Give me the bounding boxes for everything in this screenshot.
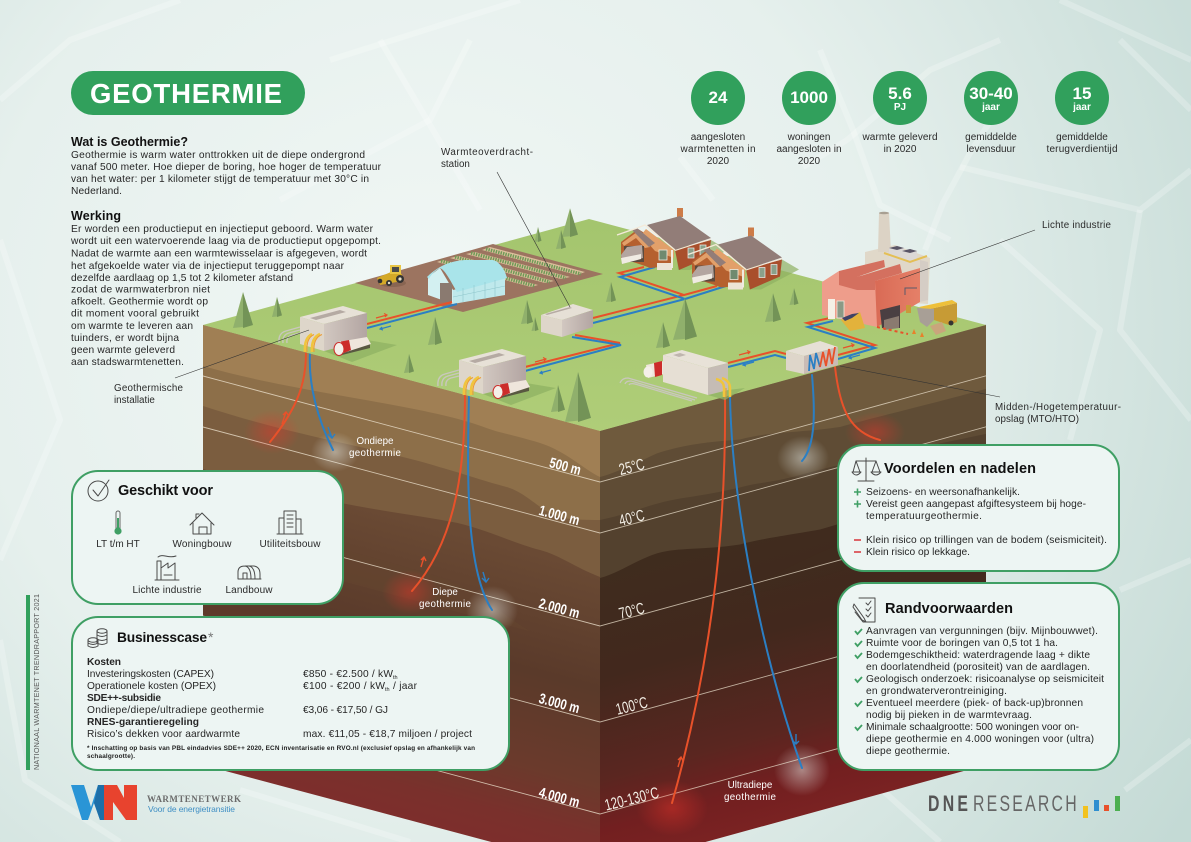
geological block: left face (203, 325, 600, 842)
icon: balance scale (852, 458, 881, 481)
list: Klein risico op trillingen van de bodem (seismiciteit). (866, 535, 1107, 546)
icon: check circle (88, 480, 109, 501)
logo: warmtenetwerk: Voor de energietransitie (148, 804, 235, 814)
underground wells (270, 352, 880, 803)
footnote: * Inschatting op basis van PBL eindadvies SDE++ 2020, ECN inventarisatie en RVO.nl (exclusief opslag en afhankelijk van (87, 745, 475, 752)
well: ultradiepe geothermie (672, 397, 802, 803)
stat: 15 jaar (1046, 71, 1118, 155)
depth labels (537, 454, 583, 811)
well: ondiepe geothermie (270, 352, 333, 450)
list: Aanvragen van vergunningen (bijv. Mijnbouwwet). (866, 626, 1098, 637)
list: Seizoens- en weersonafhankelijk. (866, 487, 1020, 498)
depth labels: 1.000 m (537, 502, 582, 529)
flow arrows underground (282, 412, 799, 767)
list: Eventueel meerdere (piek- of back-up)bronnen (866, 698, 1083, 709)
logo: DNE research: RESEARCH (973, 793, 1077, 817)
logo: warmtenetwerk: WARMTENETWERK (147, 794, 241, 804)
panel: geschikt voor (72, 471, 343, 604)
text block: wat is geothermie: Nederland. (71, 186, 122, 197)
footnote: schaalgrootte). (87, 753, 135, 760)
cost table: Ondiepe/diepe/ultradiepe geothermie (87, 705, 264, 716)
stat: 1000 woningen: 1000 (790, 88, 828, 107)
callout: warmteoverdrachtstation (441, 147, 570, 307)
side bar with report title: NATIONAAL WARMTENET TRENDRAPPORT 2021 (32, 594, 41, 770)
heading: Businesscase (117, 630, 207, 645)
geological block: right face (600, 325, 986, 842)
heat and cold reservoir glows (244, 410, 905, 836)
list: Klein risico op lekkage. (866, 547, 970, 558)
text block: werking: Nadat de warmte aan een warmtewisselaar is afgegeven, wordt (71, 248, 367, 260)
temperature labels: 25°C (617, 454, 646, 478)
text block: werking: het afgekoelde water via de injectieput teruggepompt naar (71, 261, 345, 272)
cost table: €3,06 - €17,50 / GJ (303, 705, 388, 716)
temperature labels (603, 454, 661, 814)
stat: 5.6 PJ: 5.6 (888, 84, 912, 103)
cost table: th (393, 675, 398, 681)
panel: businesscase (72, 617, 509, 770)
tractor (377, 265, 406, 287)
text block: wat is geothermie: Wat is Geothermie? (71, 135, 188, 149)
icon: greenhouse (238, 566, 261, 579)
depth labels: 4.000 m (537, 784, 582, 811)
cost table (87, 657, 472, 740)
well label: diepe: geothermie (419, 599, 472, 610)
geothermal plant 3 (620, 350, 745, 401)
heading: Voordelen en nadelen (884, 461, 1036, 477)
list: en doorlatendheid (porositeit) van de aardlagen. (866, 662, 1090, 673)
list (866, 626, 1104, 757)
label: landbouw: Landbouw (226, 585, 273, 596)
logo: DNE research: DNE (928, 793, 968, 817)
list: temperatuurgeothermie. (866, 511, 982, 522)
title pill (71, 71, 305, 115)
cost table: th (385, 687, 390, 693)
minus markers (854, 540, 861, 552)
surface flow arrows (376, 314, 860, 374)
callout: geothermische installatie (114, 330, 309, 406)
label: lichte industrie: Lichte industrie (132, 585, 202, 596)
list: nodig bij pieken in de warmtevraag. (866, 710, 1032, 721)
stat: 24 warmtenetten: 2020 (707, 156, 730, 167)
list: Vereist geen aangepast afgiftesysteem bij hoge- (866, 499, 1086, 510)
stat: 15 jaar: gemiddelde (1056, 132, 1108, 143)
text block: werking: dit moment vooral gebruikt (71, 308, 199, 320)
callout: warmteoverdrachtstation: station (441, 159, 470, 170)
callout: warmteoverdrachtstation: Warmteoverdracht- (441, 147, 533, 158)
callout: MTO/HTO opslag: Midden-/Hogetemperatuur- (995, 402, 1121, 413)
pipes to greenhouse and houses (367, 267, 875, 371)
cost table: Operationele kosten (OPEX) (87, 681, 216, 692)
well label: ondiepe: geothermie (349, 448, 402, 459)
text block: werking: zodat de warmwaterbron niet (71, 284, 210, 296)
callout: lichte industrie (900, 220, 1112, 279)
houses (617, 208, 799, 290)
heat-transfer station (541, 304, 593, 337)
list: Minimale schaalgrootte: 500 woningen voor on- (866, 722, 1079, 733)
stat: 15 jaar: terugverdientijd (1046, 144, 1118, 155)
callout: MTO/HTO opslag (840, 366, 1121, 425)
well: MTO/HTO storage (802, 367, 880, 461)
logo: warmtenetwerk (71, 785, 241, 820)
cost table: / jaar (393, 681, 418, 692)
well: diepe geothermie (412, 395, 492, 610)
stat: 5.6 PJ: PJ (894, 102, 906, 113)
label: woningbouw: Woningbouw (172, 539, 232, 550)
cost table: €100 - €200 / kW (303, 681, 385, 692)
stat: 5.6 PJ (862, 71, 938, 155)
panel: voordelen en nadelen (838, 445, 1119, 571)
greenhouse (427, 260, 507, 304)
stat: 24 warmtenetten (680, 71, 756, 167)
cost table: Investeringskosten (CAPEX) (87, 669, 214, 680)
text block: werking: dezelfde aardlaag op 1,5 tot 2 kilometer afstand (71, 273, 293, 284)
temperature labels: 120-130°C (603, 783, 661, 814)
icon: factory (155, 556, 179, 580)
well label: ondiepe: Ondiepe (356, 436, 394, 447)
plus markers (854, 488, 861, 508)
icon: office building (277, 511, 303, 534)
check markers (855, 629, 862, 730)
text block: werking: afkoelt. Geothermie wordt op (71, 296, 208, 308)
text block: wat is geothermie: Geothermie is warm water onttrokken uit de diepe ondergrond (71, 150, 365, 161)
list (866, 487, 1107, 558)
icon: thermometer (114, 511, 122, 535)
well label: ultradiepe: Ultradiepe (728, 780, 773, 791)
depth labels: 2.000 m (537, 595, 582, 622)
stat: 24 warmtenetten: aangesloten (691, 132, 745, 143)
well label: ultradiepe (724, 780, 777, 803)
well label: ondiepe (349, 436, 402, 459)
panel: randvoorwaarden (838, 583, 1119, 770)
MTO/HTO storage unit (786, 341, 838, 374)
cost table: Risico’s dekken voor aardwarmte (87, 729, 240, 740)
list: Geologisch onderzoek: risicoanalyse op seismiciteit (866, 674, 1104, 685)
stat: 1000 woningen: woningen (787, 132, 830, 143)
factory (822, 212, 957, 337)
stat: 30-40 jaar: levensduur (967, 144, 1016, 155)
well label: diepe (419, 587, 472, 610)
stat: 30-40 jaar: 30-40 (969, 84, 1013, 103)
panel: businesscase: * (208, 629, 214, 645)
text block: wat is geothermie: van het water: per 1 kilometer stijgt de temperatuur met 30°C in (71, 174, 369, 185)
text block: wat is geothermie (71, 135, 382, 197)
callout: lichte industrie: Lichte industrie (1042, 220, 1112, 231)
geothermal plant 2 (438, 349, 556, 405)
icon: house (190, 513, 214, 534)
heading: Geschikt voor (118, 483, 213, 499)
text block: werking (70, 209, 381, 368)
stat: 5.6 PJ: warmte geleverd (862, 132, 938, 143)
stat: 15 jaar: jaar (1072, 102, 1091, 113)
list: diepe geothermie. (866, 746, 950, 757)
temperature labels: 100°C (614, 693, 649, 718)
cost table: RNES-garantieregeling (87, 717, 199, 728)
list: Bodemgeschiktheid: waterdragende laag + dikte (866, 650, 1090, 661)
farmland (355, 244, 603, 312)
text block: werking: om warmte te leveren aan (71, 321, 193, 332)
stat: 15 jaar: 15 (1073, 84, 1091, 103)
stat: 1000 woningen: aangesloten in (776, 144, 842, 155)
icon: checklist and pencil (853, 598, 875, 622)
stat: 1000 woningen (776, 71, 842, 167)
cost table: €850 - €2.500 / kW (303, 669, 393, 680)
stat: 30-40 jaar: jaar (981, 102, 1000, 113)
trees (233, 208, 798, 422)
text block: werking: Er worden een productieput en injectieput geboord. Warm water (71, 224, 374, 235)
text block: werking: Werking (71, 209, 121, 223)
cost table: SDE++-subsidie (87, 693, 161, 704)
stat: 1000 woningen: 2020 (798, 156, 821, 167)
text block: werking: wordt uit een watervoerende laag via de productieput opgepompt. (70, 236, 381, 247)
temperature labels: 70°C (617, 598, 646, 622)
stat: 5.6 PJ: in 2020 (884, 144, 917, 155)
depth labels: 500 m (548, 454, 583, 478)
label: utiliteitsbouw: Utiliteitsbouw (260, 539, 321, 550)
well label: ultradiepe: geothermie (724, 792, 777, 803)
list: en grondwaterverontreiniging. (866, 686, 1007, 697)
icon: coins (88, 629, 107, 648)
list: diepe geothermie en 4.000 woningen voor (ultra) (866, 734, 1094, 745)
ground surface (203, 208, 986, 431)
cost table: Kosten (87, 657, 121, 668)
callout: geothermische installatie: Geothermische (114, 383, 184, 394)
geothermal plant 1 (279, 306, 397, 362)
footnote (87, 745, 475, 760)
title pill: GEOTHERMIE (90, 78, 282, 109)
text block: wat is geothermie: vanaf 500 meter. Hoe dieper de boring, hoe hoger de temperatuur (71, 162, 382, 173)
text block: werking: geen warmte geleverd (71, 345, 175, 356)
depth labels: 3.000 m (537, 690, 582, 717)
stat: 30-40 jaar (964, 71, 1018, 155)
side bar with report title (26, 594, 41, 770)
label: LT t/m HT: LT t/m HT (96, 539, 140, 550)
text block: werking: aan stadswarmtenetten. (71, 357, 184, 368)
logo: DNE research (928, 793, 1120, 818)
well label: diepe: Diepe (432, 587, 458, 598)
callout: geothermische installatie: installatie (114, 395, 155, 406)
heading: Randvoorwaarden (885, 601, 1013, 617)
cost table: max. €11,05 - €18,7 miljoen / project (303, 729, 472, 740)
list: Ruimte voor de boringen van 0,5 tot 1 ha. (866, 638, 1058, 649)
stat: 24 warmtenetten: warmtenetten in (680, 144, 756, 155)
stat: 30-40 jaar: gemiddelde (965, 132, 1017, 143)
text block: werking: tuinders, er wordt bijna (71, 333, 179, 344)
callout: MTO/HTO opslag: opslag (MTO/HTO) (995, 414, 1079, 425)
stat: 24 warmtenetten: 24 (709, 88, 728, 107)
temperature labels: 40°C (617, 505, 646, 529)
